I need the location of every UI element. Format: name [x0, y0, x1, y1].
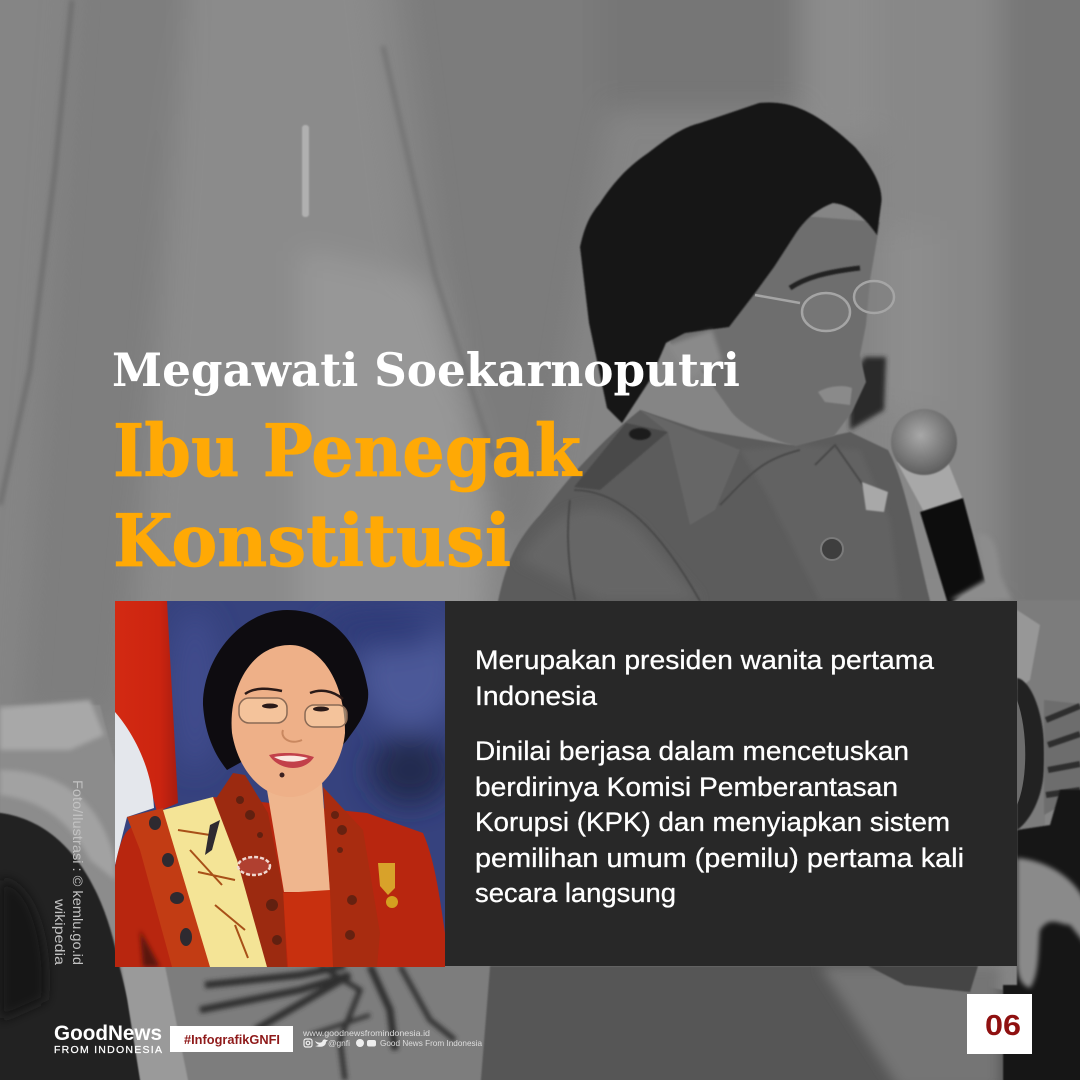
title: epithet: Konstitusi: [113, 498, 511, 583]
lace left lapel: [215, 773, 287, 967]
social links: [302, 1028, 482, 1048]
lips: [818, 386, 852, 405]
chair left: [94, 706, 108, 742]
text block 1: Merupakan presiden wanita pertama: [475, 645, 935, 675]
neck: [267, 782, 330, 892]
eyebrow and ear: [790, 268, 860, 288]
body kebaya: [115, 797, 445, 967]
lower left shadow: [140, 930, 160, 967]
flag red: [115, 601, 178, 812]
photo credit: wikipedia: [52, 898, 68, 965]
backdrop mottling: [170, 610, 460, 805]
inner dress: [283, 890, 334, 967]
text block 2: Korupsi (KPK) dan menyiapkan sistem: [475, 807, 950, 837]
glasses: [755, 281, 894, 331]
logo: GoodNews from Indonesia: [54, 1022, 162, 1056]
brooch: [238, 857, 270, 875]
palm area: [165, 966, 490, 1080]
hand: [1017, 858, 1080, 988]
curtain highlight: [302, 125, 309, 217]
text block 2: [475, 736, 964, 908]
microphone: [897, 460, 963, 512]
photo credit: [52, 780, 86, 965]
icon: twitter: [315, 1039, 328, 1047]
chair post: [122, 966, 192, 1080]
icon: instagram: [304, 1039, 312, 1047]
scarf yellow: [163, 797, 267, 967]
shirt: [498, 410, 930, 610]
title: name: Megawati Soekarnoputri: [112, 343, 740, 397]
hashtag badge: #InfografikGNFI: [184, 1032, 280, 1047]
logo: GoodNews from Indonesia: FROM INDONESIA: [54, 1044, 162, 1056]
page number: 06: [985, 1010, 1021, 1042]
flag white: [115, 712, 154, 865]
medal: [378, 863, 395, 895]
eyes: [262, 704, 329, 712]
text block 2: berdirinya Komisi Pemberantasan: [475, 772, 898, 802]
nose shadow: [282, 730, 302, 742]
icon: youtube: [367, 1040, 376, 1046]
text block 2: secara langsung: [475, 878, 676, 908]
face: [232, 645, 345, 797]
curtain folds: [288, 0, 1080, 601]
icon: facebook: [356, 1039, 364, 1047]
hair behind chin: [850, 357, 886, 430]
right side scene: [1022, 661, 1080, 828]
title: epithet: [113, 408, 583, 583]
face: [670, 215, 880, 446]
logo: GoodNews from Indonesia: GoodNews: [54, 1022, 162, 1045]
social links: www.goodnewsfromindonesia.id: [302, 1028, 430, 1038]
photo credit: Foto/Ilustrasi : © kemlu.go.id: [70, 780, 86, 965]
social links: Good News From Indonesia: [380, 1038, 482, 1048]
text block 1: [475, 645, 935, 711]
info panel: [445, 601, 1017, 966]
glasses: [239, 698, 347, 727]
mouth: [269, 753, 314, 768]
scarf border: [127, 808, 210, 967]
social links: @gnfi: [328, 1038, 350, 1048]
hair: [203, 610, 368, 770]
hair: [580, 103, 882, 423]
title: epithet: Ibu Penegak: [113, 408, 583, 493]
curtain shadow lines: [0, 0, 72, 505]
page number: [967, 994, 1032, 1054]
text block 1: Indonesia: [475, 681, 598, 711]
shirt shading: [574, 423, 668, 490]
eyebrows: [245, 689, 343, 699]
dress lower: [480, 966, 1003, 1080]
chair dark upholstery: [0, 812, 142, 1080]
lace right lapel: [323, 787, 380, 967]
portrait photo: [115, 601, 460, 967]
text block 2: Dinilai berjasa dalam mencetuskan: [475, 736, 909, 766]
hashtag badge: [170, 1026, 293, 1052]
text block 2: pemilihan umum (pemilu) pertama kali: [475, 843, 964, 873]
